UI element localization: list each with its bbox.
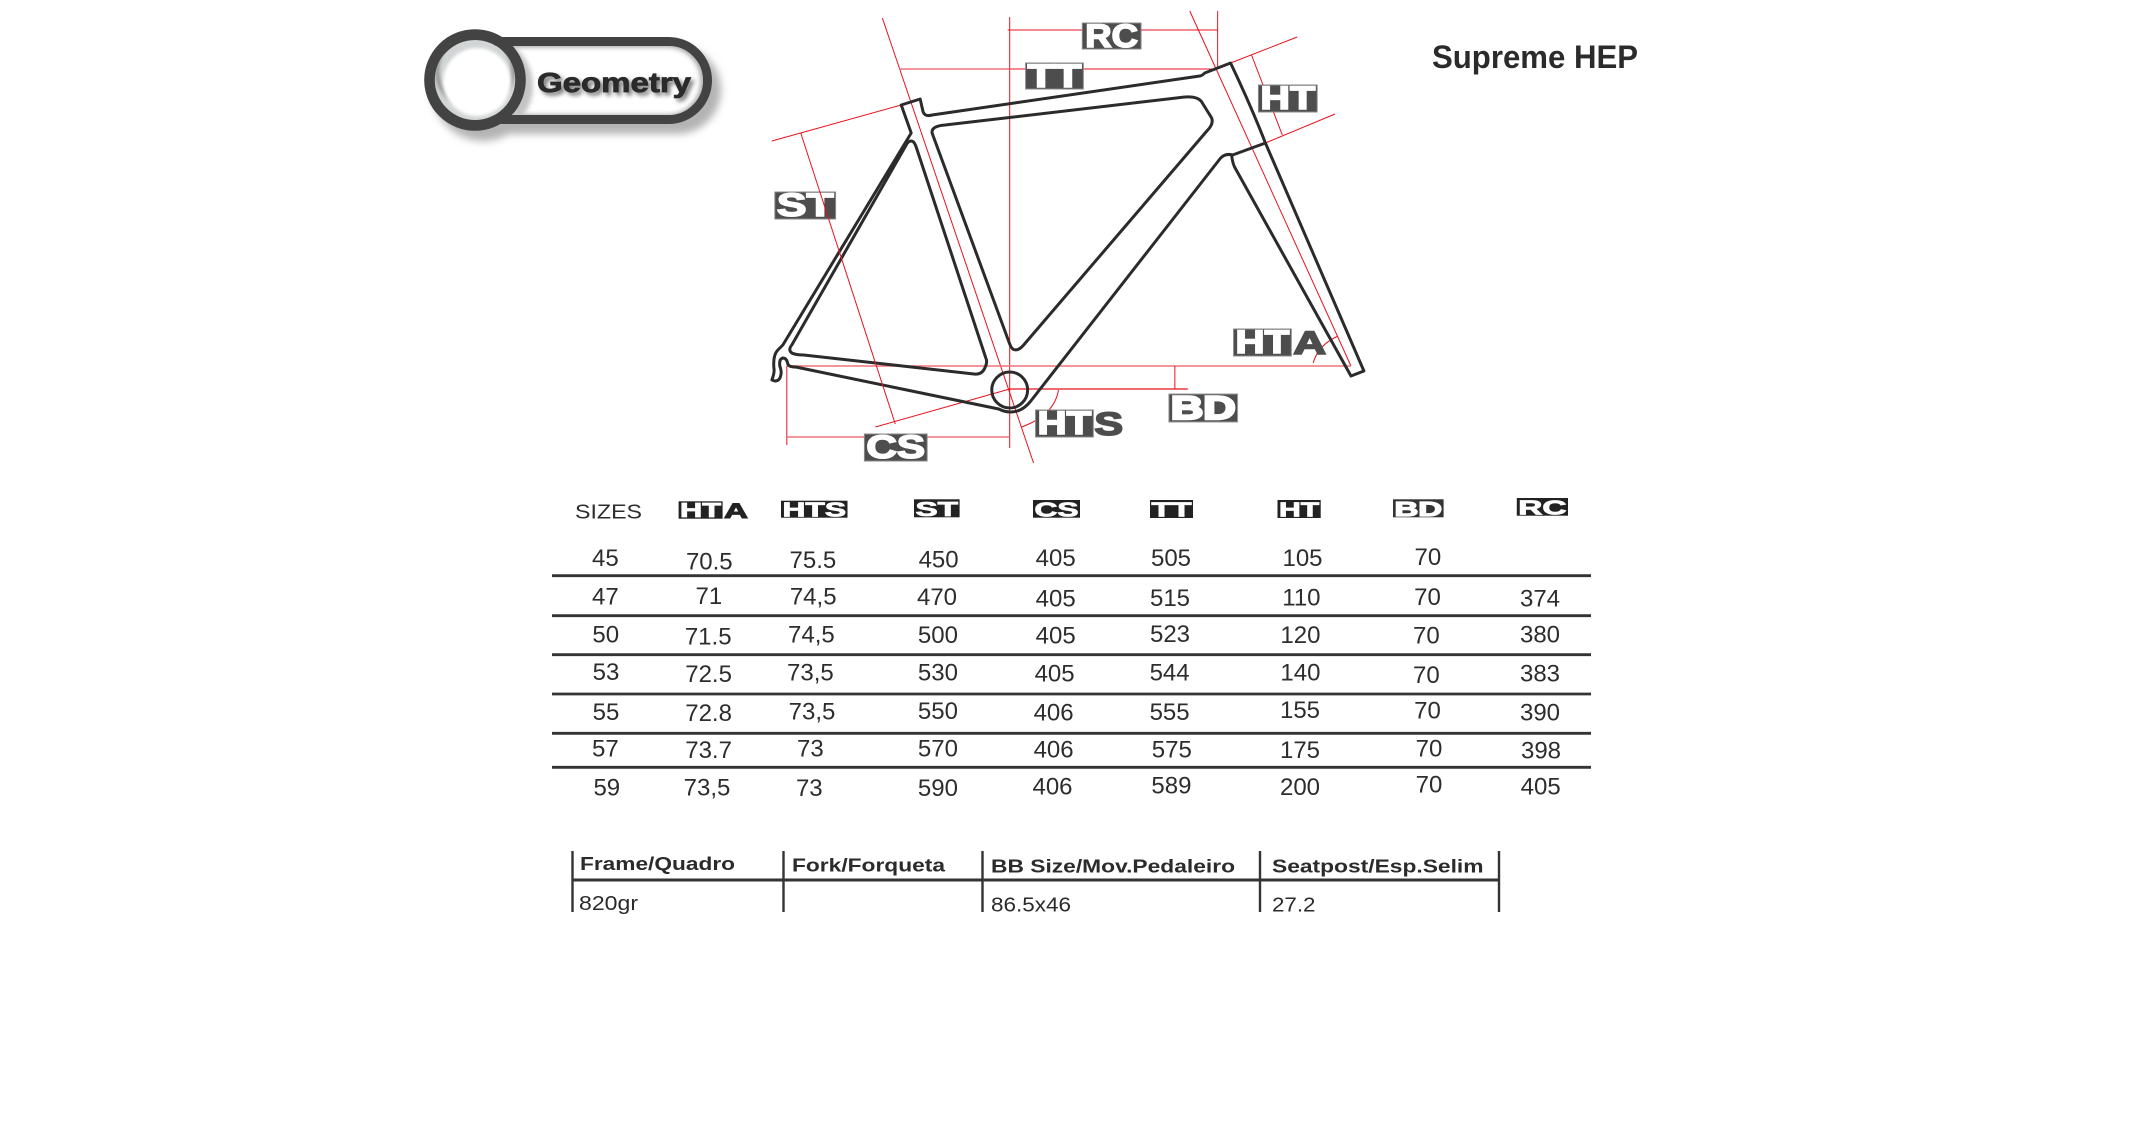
row: size 47: 110 <box>1282 584 1321 611</box>
row: size 45: 75.5 <box>790 547 836 574</box>
column header: HTA <box>679 500 748 523</box>
diagram label: HTA <box>1234 324 1326 361</box>
row: size 45: 105 <box>1282 545 1323 572</box>
row: size 50: 74,5 <box>788 622 835 649</box>
row: size 50: 380 <box>1520 622 1560 649</box>
row: size 59: 73 <box>796 775 823 802</box>
row: size 55 <box>593 697 1560 727</box>
column header: HTA: HT <box>680 500 721 522</box>
row: size 53: 405 <box>1035 661 1075 688</box>
row: size 57: 57 <box>592 736 619 763</box>
row: size 45: 45 <box>592 545 619 572</box>
row: size 53: 70 <box>1413 662 1440 689</box>
diagram label: HTA: A <box>1293 325 1326 361</box>
row: size 47: 470 <box>917 584 957 611</box>
row: size 50: 405 <box>1036 623 1076 650</box>
spec: frame: 820gr <box>579 893 638 915</box>
row: size 59: 73,5 <box>684 774 730 801</box>
column header: HTS <box>781 499 848 521</box>
column header: HT: HT <box>1279 500 1319 522</box>
row: size 55: 72.8 <box>685 700 732 727</box>
row: size 50: 523 <box>1150 621 1190 648</box>
row: size 45: 70 <box>1415 544 1441 571</box>
row: size 47: 405 <box>1036 585 1076 612</box>
column header: HTA: A <box>724 500 748 523</box>
seat tube dimension line <box>801 133 895 424</box>
badge ring <box>430 32 520 126</box>
diagram label: TT: TT <box>1028 58 1082 94</box>
row: size 59: 200 <box>1280 774 1320 801</box>
row: size 53: 544 <box>1150 660 1190 687</box>
bottom bracket <box>992 372 1028 408</box>
rear triangle opening <box>790 141 987 374</box>
main triangle opening <box>932 97 1212 350</box>
diagram label: RC: RC <box>1085 18 1138 54</box>
row: size 47: 515 <box>1150 585 1190 612</box>
row: size 53: 53 <box>593 659 619 686</box>
row: size 57: 175 <box>1280 737 1320 764</box>
title: Supreme HEP <box>1432 39 1638 75</box>
row: size 55: 406 <box>1034 700 1074 727</box>
column header: HTS: HTS <box>782 499 846 521</box>
row: size 59: 70 <box>1416 772 1442 799</box>
diagram label: HTS <box>1036 405 1123 442</box>
frame drawing <box>772 63 1364 412</box>
row: size 57: 73 <box>797 736 824 763</box>
row: size 55: 73,5 <box>789 698 835 725</box>
row: size 59 <box>593 772 1561 802</box>
diagram label: ST <box>775 187 836 223</box>
badge: Geometry <box>430 32 721 141</box>
row: size 50: 70 <box>1413 623 1440 650</box>
diagram label: TT <box>1026 58 1083 94</box>
row: size 45: 505 <box>1151 545 1191 572</box>
column header: ST: ST <box>916 499 958 521</box>
row: size 53: 530 <box>918 659 958 686</box>
row: size 53 <box>593 659 1560 689</box>
row: size 55: 70 <box>1414 698 1441 725</box>
row: size 45: 70.5 <box>686 548 733 575</box>
row: size 50: 120 <box>1280 622 1320 649</box>
specs table <box>572 851 1500 917</box>
row: size 59: 589 <box>1151 773 1191 800</box>
spec: BB size: BB Size/Mov.Pedaleiro <box>991 856 1235 877</box>
row: size 59: 405 <box>1521 774 1561 801</box>
column header: TT: TT <box>1152 500 1192 522</box>
row: size 57 <box>592 736 1561 764</box>
row: size 55: 550 <box>918 698 958 725</box>
row: size 55: 55 <box>593 699 619 726</box>
row: size 45 <box>592 544 1441 575</box>
row: size 59: 59 <box>593 775 620 802</box>
row: size 50: 71.5 <box>685 624 732 651</box>
row: size 45: 450 <box>919 546 959 573</box>
row: size 47: 47 <box>592 584 619 611</box>
row: size 53: 140 <box>1280 659 1320 686</box>
row: size 57: 73.7 <box>685 737 732 764</box>
diagram label: ST: ST <box>777 187 834 223</box>
row: size 59: 590 <box>918 775 958 802</box>
row: size 53: 383 <box>1520 661 1560 688</box>
spec: BB size: 86.5x46 <box>991 895 1071 917</box>
diagram label: BD: BD <box>1171 390 1236 426</box>
column header: RC <box>1517 497 1568 519</box>
spec: seatpost <box>1272 856 1484 917</box>
row: size 57: 406 <box>1034 736 1074 763</box>
geometry table <box>552 497 1591 802</box>
frame geometry diagram <box>772 11 1364 465</box>
column header: CS: CS <box>1034 499 1078 521</box>
row: size 57: 70 <box>1416 736 1442 763</box>
row: size 57: 575 <box>1152 736 1192 763</box>
spec: frame <box>579 853 735 915</box>
diagram label: HTS: HT <box>1038 405 1092 441</box>
spec: BB size <box>991 856 1235 917</box>
column header: BD: BD <box>1394 499 1442 521</box>
row: size 57: 570 <box>918 736 958 763</box>
badge pill <box>437 37 712 124</box>
column header: TT <box>1150 500 1193 522</box>
row: size 57: 398 <box>1521 737 1561 764</box>
row: size 55: 155 <box>1280 697 1320 724</box>
row: size 53: 73,5 <box>787 660 834 687</box>
frame outer outline <box>772 63 1364 412</box>
spec: seatpost: Seatpost/Esp.Selim <box>1272 856 1484 877</box>
row: size 50: 50 <box>592 622 619 649</box>
row: size 55: 390 <box>1520 700 1560 727</box>
spec: seatpost: 27.2 <box>1272 895 1316 917</box>
column header: RC: RC <box>1518 497 1566 519</box>
dimension lines <box>772 11 1351 463</box>
diagram label: HTS: S <box>1094 406 1123 442</box>
column header: HT <box>1278 500 1321 522</box>
diagram label: HT: HT <box>1260 80 1316 116</box>
row: size 47: 71 <box>696 583 722 610</box>
row: size 59: 406 <box>1032 773 1073 800</box>
row: size 45: 405 <box>1036 545 1076 572</box>
diagram label: BD <box>1169 390 1238 426</box>
spec: fork: Fork/Forqueta <box>792 855 946 876</box>
badge label: Geometry <box>537 67 692 98</box>
column header: CS <box>1033 499 1080 521</box>
row: size 55: 555 <box>1150 699 1190 726</box>
row: size 50 <box>592 621 1560 651</box>
column header: BD <box>1393 499 1444 521</box>
spec: frame: Frame/Quadro <box>580 853 735 874</box>
badge shadow <box>432 39 721 141</box>
row: size 47: 70 <box>1414 584 1441 611</box>
row: size 47: 74,5 <box>790 584 837 611</box>
row: size 53: 72.5 <box>685 661 732 688</box>
column header: ST <box>914 499 960 521</box>
row: size 47 <box>592 583 1560 613</box>
row: size 47: 374 <box>1520 586 1560 613</box>
row: size 50: 500 <box>918 622 958 649</box>
diagram label: HTA: HT <box>1236 324 1290 360</box>
diagram label: CS: CS <box>866 429 925 465</box>
column header: sizes: SIZES <box>575 500 642 523</box>
